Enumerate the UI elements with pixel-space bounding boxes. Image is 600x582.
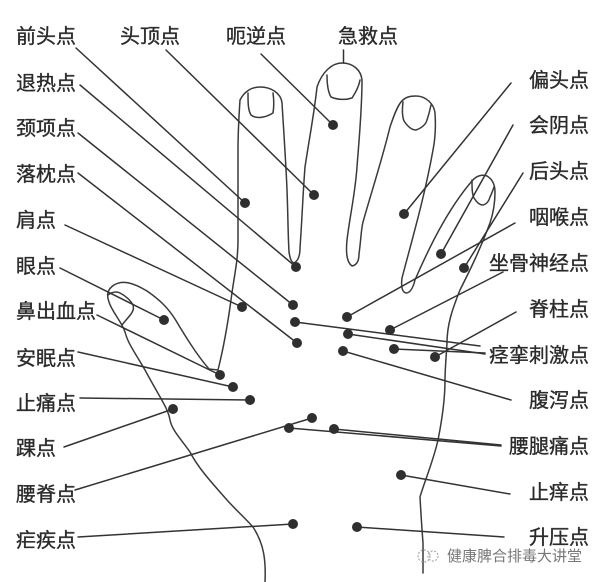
left labels: 安眠点 — [16, 347, 76, 370]
right labels — [489, 69, 589, 549]
left labels: 踝点 — [16, 437, 56, 460]
fingernails — [108, 75, 494, 325]
left labels: 退热点 — [16, 72, 76, 95]
top labels — [120, 25, 398, 48]
right labels: 坐骨神经点 — [489, 252, 589, 275]
left labels: 眼点 — [16, 255, 56, 278]
leader lines — [60, 48, 523, 537]
hand outline — [108, 63, 495, 582]
right labels: 止痒点 — [529, 481, 589, 504]
icon: watermark logo — [418, 550, 438, 562]
right labels: 脊柱点 — [529, 298, 589, 321]
right labels: 后头点 — [529, 160, 589, 183]
right labels: 腰腿痛点 — [509, 435, 589, 458]
right labels: 升压点 — [529, 526, 589, 549]
right labels: 痉挛刺激点 — [489, 344, 589, 367]
right labels: 腹泻点 — [529, 389, 589, 412]
left labels — [16, 25, 96, 552]
left labels: 鼻出血点 — [16, 300, 96, 323]
right labels: 会阴点 — [529, 114, 589, 137]
top labels: 呃逆点 — [226, 25, 286, 48]
left labels: 止痛点 — [16, 392, 76, 415]
left labels: 颈项点 — [16, 117, 76, 140]
left labels: 落枕点 — [16, 163, 76, 186]
left labels: 前头点 — [16, 25, 76, 48]
left labels: 肩点 — [16, 209, 56, 232]
acupoint dots — [159, 120, 469, 532]
top labels: 头顶点 — [120, 25, 180, 48]
left labels: 腰脊点 — [16, 483, 76, 506]
top labels: 急救点 — [338, 25, 398, 48]
left labels: 疟疾点 — [16, 529, 76, 552]
watermark text: 健康脾合排毒大讲堂 — [447, 548, 582, 565]
right labels: 咽喉点 — [529, 206, 589, 229]
watermark — [418, 548, 582, 565]
right labels: 偏头点 — [529, 69, 589, 92]
